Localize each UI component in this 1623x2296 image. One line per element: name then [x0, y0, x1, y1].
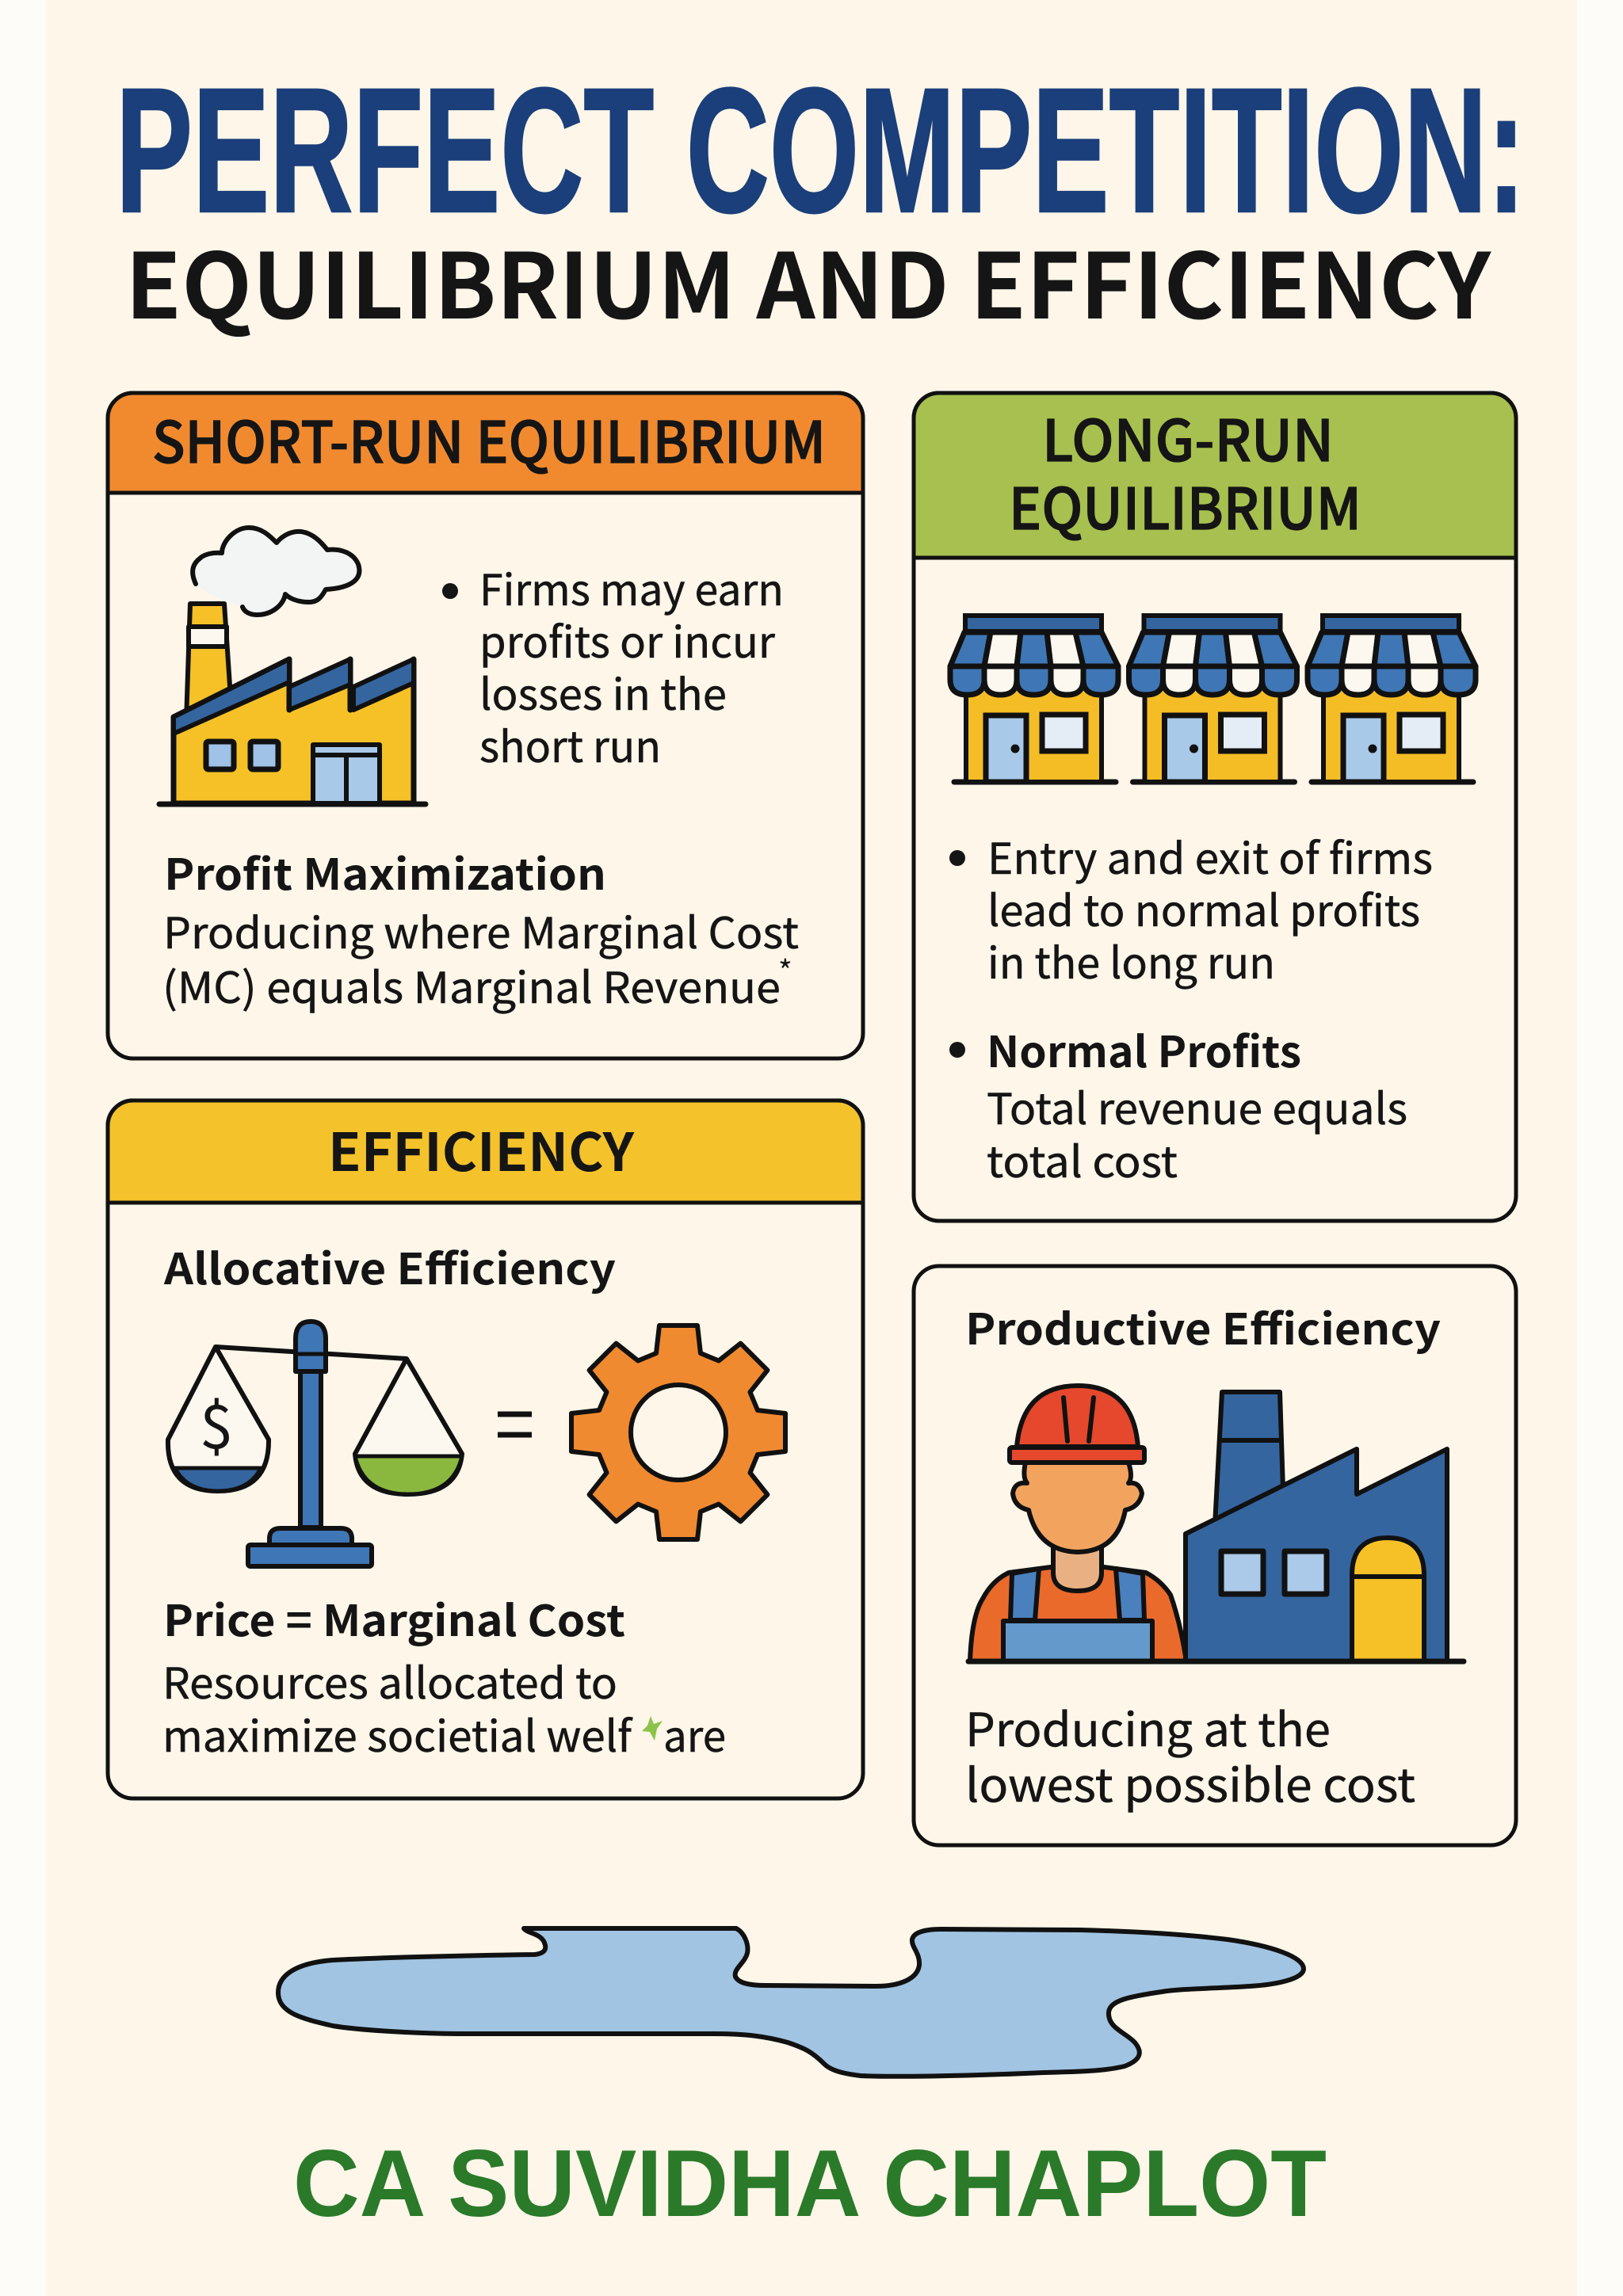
blue blob shape	[278, 1928, 1304, 2077]
allocative efficiency heading: Allocative Efficiency	[163, 1234, 616, 1297]
normal profits bullet: total cost	[987, 1127, 1178, 1190]
efficiency description	[162, 1649, 726, 1764]
long-run heading: LONG-RUN	[1042, 395, 1334, 478]
efficiency description: are	[663, 1702, 726, 1764]
short-run bullet text: Firms may earn	[479, 555, 784, 618]
panel: short-run equilibrium	[108, 393, 863, 1058]
panel: efficiency	[108, 1100, 863, 1798]
productive efficiency description: lowest possible cost	[965, 1749, 1415, 1815]
efficiency header band	[108, 1100, 863, 1203]
productive efficiency description: Producing at the	[965, 1693, 1331, 1760]
footer name: CA SUVIDHA CHAPLOT	[293, 2130, 1327, 2237]
price equals marginal cost heading: Price = Marginal Cost	[163, 1586, 625, 1649]
short-run bullet text: profits or incur	[479, 608, 776, 670]
long-run entry and exit bullet	[949, 824, 1433, 991]
profit maximization heading: Profit Maximization	[164, 840, 606, 902]
profit maximization description: *	[778, 948, 792, 991]
normal profits bullet	[949, 1017, 1407, 1190]
equals sign	[498, 1414, 532, 1435]
productive efficiency description	[965, 1693, 1415, 1815]
productive efficiency heading: Productive Efficiency	[965, 1295, 1441, 1357]
long-run entry and exit bullet: Entry and exit of firms	[987, 824, 1433, 887]
short-run bullet text: short run	[479, 712, 661, 775]
short-run bullet text	[442, 555, 784, 775]
panel: productive efficiency	[914, 1266, 1516, 1845]
icon: gear	[571, 1325, 785, 1539]
normal profits bullet: Total revenue equals	[987, 1074, 1407, 1137]
icon: worker in hard hat	[970, 1386, 1186, 1661]
long-run entry and exit bullet: in the long run	[987, 929, 1275, 991]
efficiency description: Resources allocated to	[162, 1649, 617, 1711]
efficiency description: maximize societial welf	[162, 1702, 633, 1764]
short-run header band	[108, 393, 863, 493]
long-run heading: EQUILIBRIUM	[1009, 463, 1361, 546]
long-run header band	[914, 393, 1516, 558]
panel: long-run equilibrium	[914, 393, 1516, 1221]
subtitle: EQUILIBRIUM AND EFFICIENCY	[125, 214, 1491, 345]
icon: factory with smoke	[159, 528, 426, 804]
short-run bullet text: losses in the	[479, 660, 727, 723]
icon: three shops	[950, 616, 1476, 782]
normal profits bullet: Normal Profits	[987, 1017, 1301, 1080]
profit maximization description: Producing where Marginal Cost	[163, 898, 799, 961]
long-run entry and exit bullet: lead to normal profits	[987, 876, 1420, 939]
icon: balance scale: $	[200, 1379, 233, 1466]
efficiency heading: EFFICIENCY	[328, 1111, 635, 1187]
profit maximization description: (MC) equals Marginal Revenue	[162, 953, 781, 1016]
icon: balance scale	[168, 1322, 462, 1566]
icon: blue factory	[968, 1392, 1464, 1661]
long-run heading	[1009, 395, 1361, 546]
short-run heading: SHORT-RUN EQUILIBRIUM	[152, 396, 826, 479]
icon: green star	[642, 1716, 663, 1741]
profit maximization description	[162, 898, 799, 1016]
